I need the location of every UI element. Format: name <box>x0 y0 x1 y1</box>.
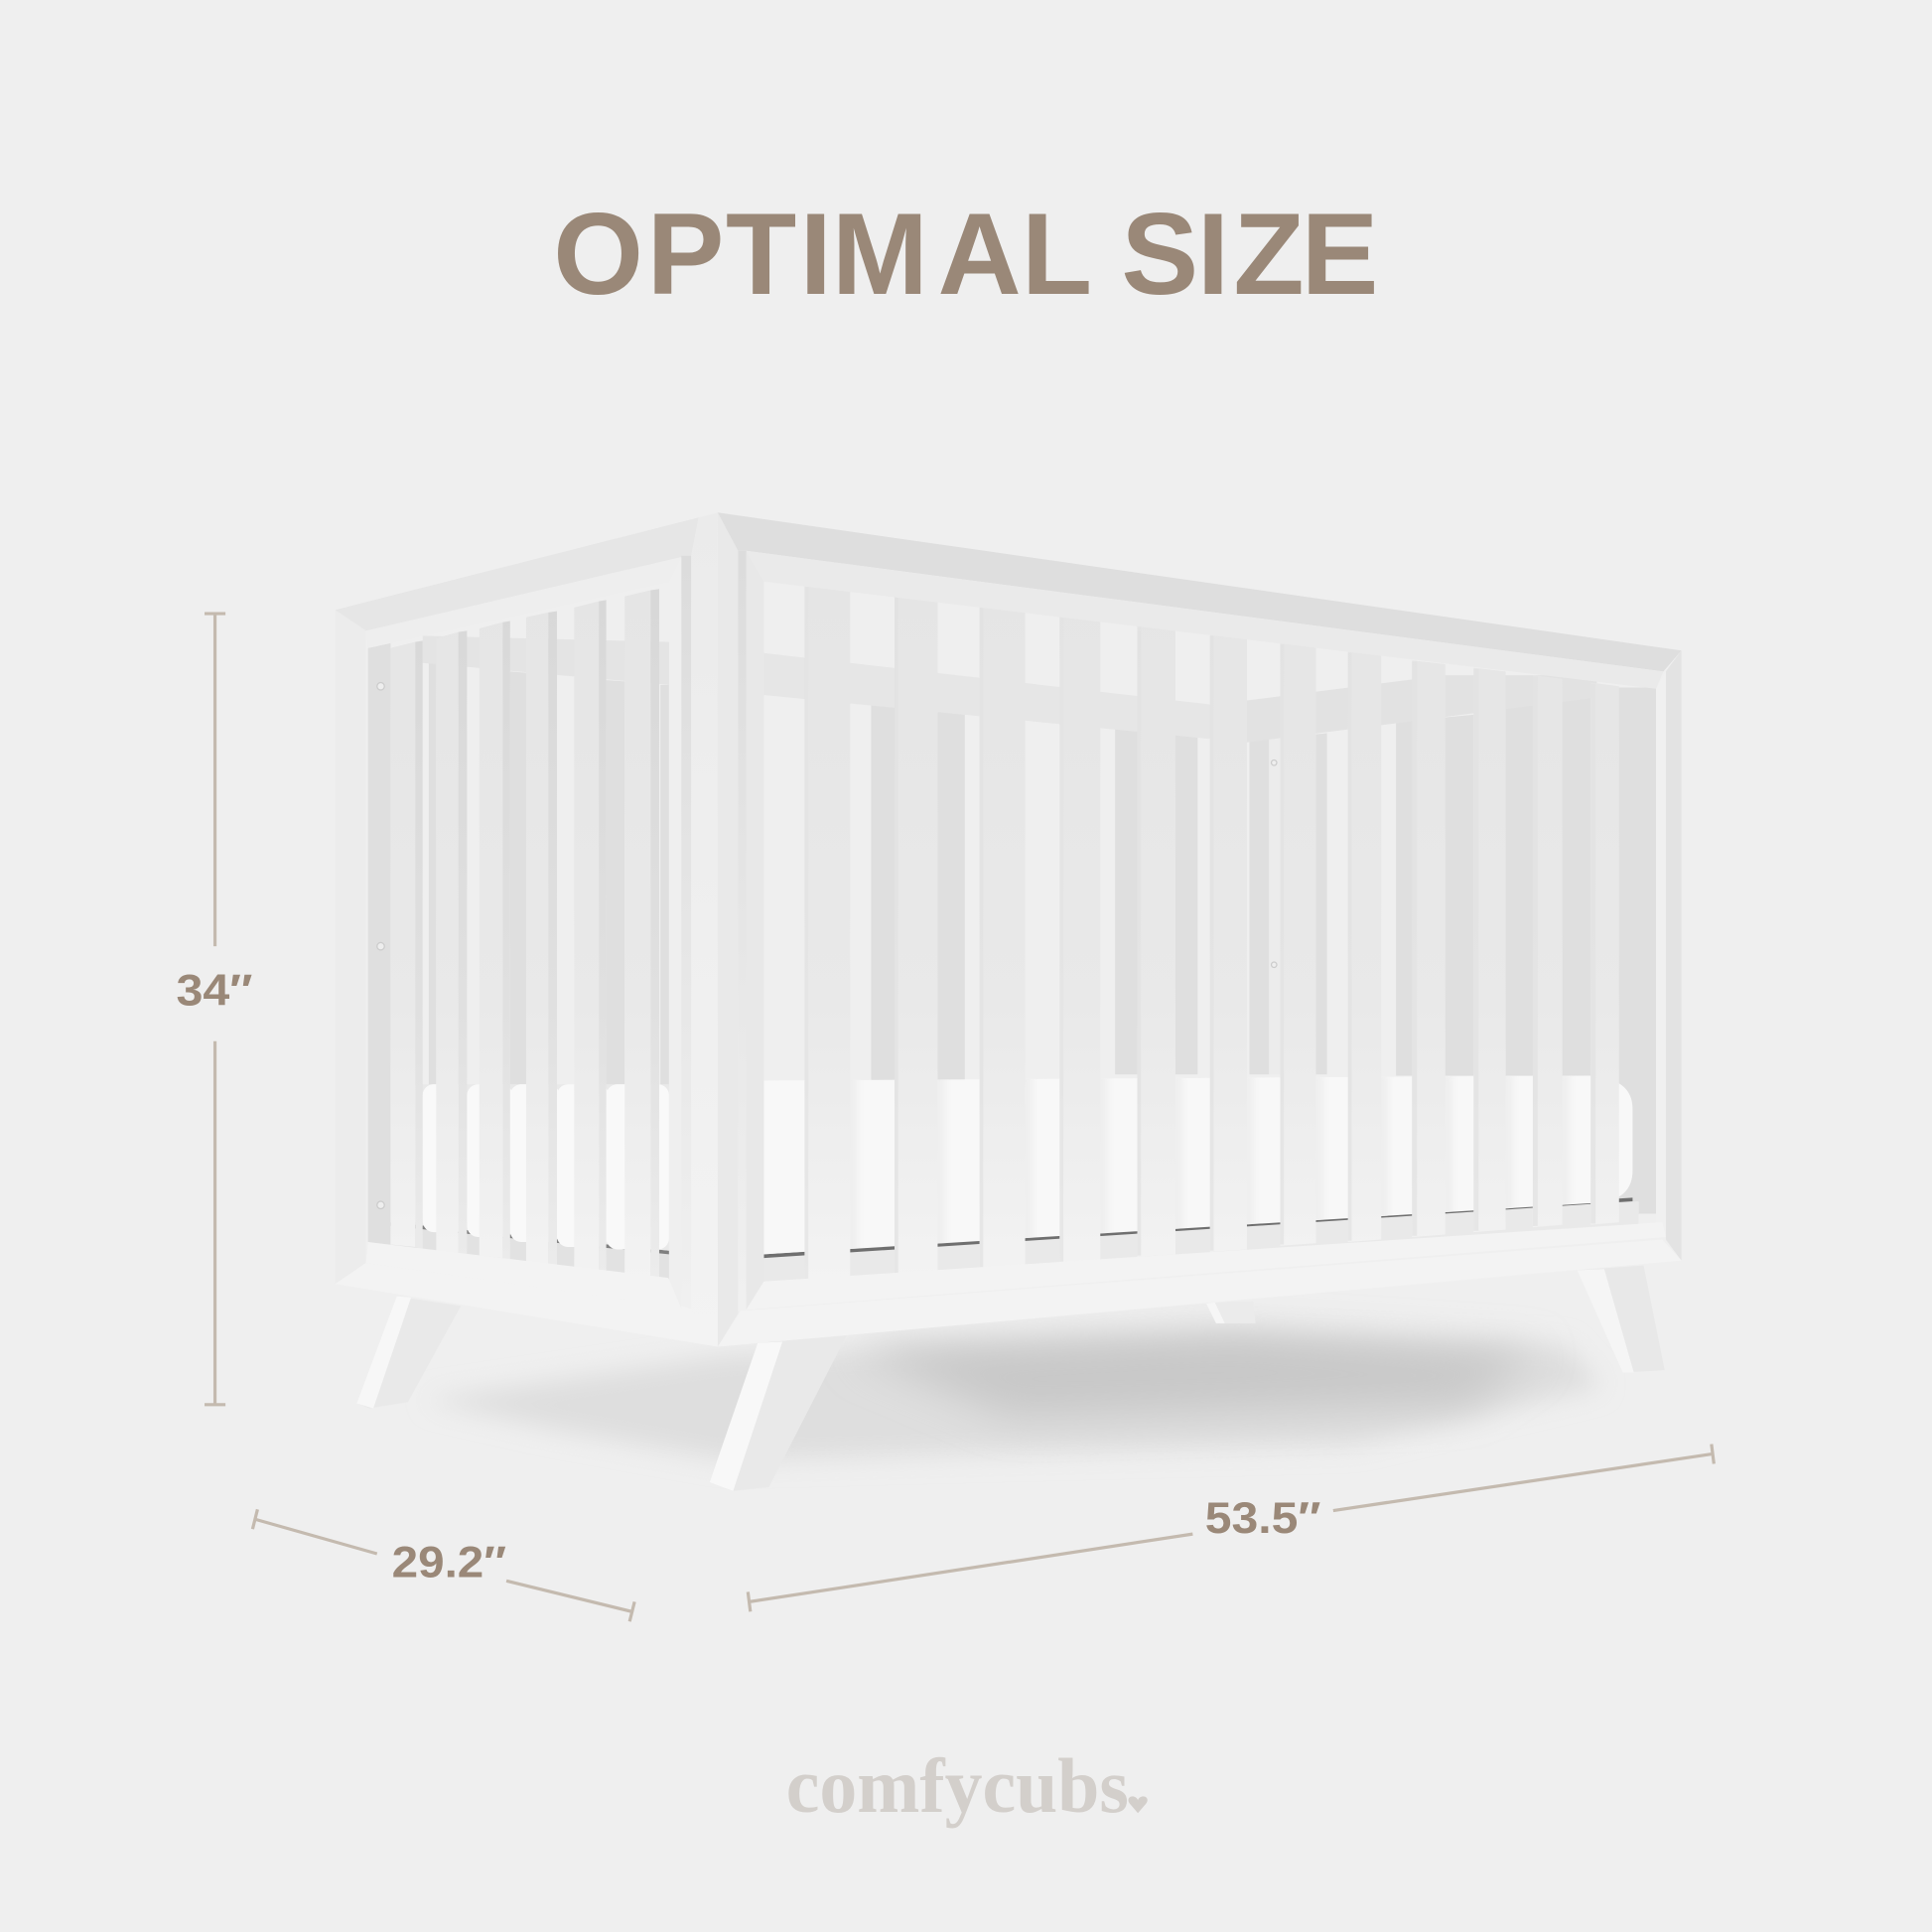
height dimension <box>176 614 252 1405</box>
right leg <box>1578 1266 1665 1373</box>
depth dimension <box>252 1509 634 1621</box>
infographic canvas <box>177 212 1716 1829</box>
corner leg <box>710 1335 847 1491</box>
width dimension: 53.5″ <box>1205 1494 1320 1543</box>
height dimension: 34″ <box>176 967 252 1016</box>
depth dimension: 29.2″ <box>392 1539 506 1587</box>
left end frame <box>336 517 718 1346</box>
logo: comfycubs <box>786 1742 1129 1829</box>
floor shadow <box>425 1333 1601 1460</box>
front left leg <box>356 1297 461 1409</box>
crib <box>336 512 1682 1491</box>
screws <box>377 683 1277 1208</box>
mattress <box>390 1072 1639 1287</box>
icon: heart <box>1129 1796 1148 1813</box>
front slats <box>804 584 1619 1282</box>
left end slats <box>390 589 659 1279</box>
front frame <box>718 512 1682 1346</box>
width dimension <box>748 1445 1714 1611</box>
corner post <box>691 512 747 1346</box>
title: OPTIMALSIZE <box>553 189 1378 319</box>
rear leg <box>1206 1302 1256 1323</box>
back rails and back slats <box>368 635 1656 1247</box>
